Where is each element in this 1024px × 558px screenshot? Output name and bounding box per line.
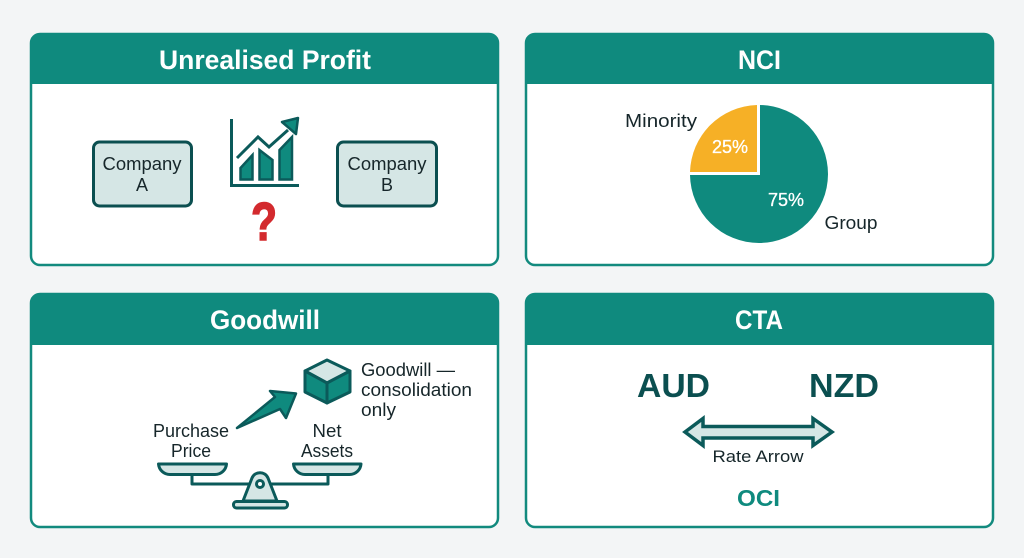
header bar: CTA	[525, 293, 994, 345]
heading: Goodwill: Goodwill	[210, 305, 320, 335]
label: Group: Group	[824, 213, 878, 233]
box: Company A: Company	[102, 154, 182, 174]
header bar: Unrealised Profit	[30, 33, 499, 84]
panel: NCI	[525, 33, 994, 265]
label: Goodwill consolidation only: consolidation	[361, 380, 472, 400]
label: Net Assets	[301, 421, 353, 461]
icon: balance scale	[158, 464, 361, 508]
currency: AUD: AUD	[637, 367, 710, 404]
header bar: Goodwill	[30, 293, 499, 345]
pie slice: Minority 25%	[690, 105, 757, 172]
icon: red question mark: ?	[251, 192, 277, 252]
label: Net Assets: Assets	[301, 441, 353, 461]
heading: CTA: CTA	[735, 305, 783, 335]
arrow: double-headed rate arrow	[685, 418, 832, 446]
pie chart: ownership split	[690, 105, 828, 243]
label: 25%: 25%	[712, 137, 748, 157]
label: Purchase Price: Purchase	[153, 421, 229, 441]
label: Goodwill consolidation only	[361, 360, 472, 420]
label: Minority: Minority	[625, 111, 697, 131]
label: Net Assets: Net	[312, 421, 342, 441]
currency: NZD: NZD	[809, 367, 879, 404]
panel: CTA	[525, 293, 994, 527]
box: Company B: Company	[348, 154, 426, 174]
heading: Unrealised Profit: Unrealised Profit	[159, 45, 371, 75]
pie slice: Group 75%	[690, 105, 828, 243]
arrow: toward goodwill	[237, 391, 296, 428]
label: OCI: OCI	[737, 485, 780, 511]
label: 75%: 75%	[768, 190, 804, 210]
heading: NCI: NCI	[738, 45, 781, 75]
label: Goodwill consolidation only: only	[361, 400, 396, 420]
label: Rate Arrow: Rate Arrow	[712, 448, 804, 466]
label: Purchase Price: Price	[171, 441, 211, 461]
box: Company B	[338, 142, 436, 206]
box: Company A	[94, 142, 192, 206]
label: Purchase Price	[153, 421, 229, 461]
header bar: NCI	[525, 33, 994, 84]
icon: goodwill cube	[305, 360, 350, 403]
label: Goodwill consolidation only: Goodwill —	[361, 360, 455, 380]
box: Company B: B	[381, 175, 393, 195]
icon: rising bar chart	[232, 118, 299, 186]
panel: Goodwill	[30, 293, 499, 527]
panel: Unrealised Profit	[30, 33, 499, 265]
box: Company A: A	[136, 175, 148, 195]
